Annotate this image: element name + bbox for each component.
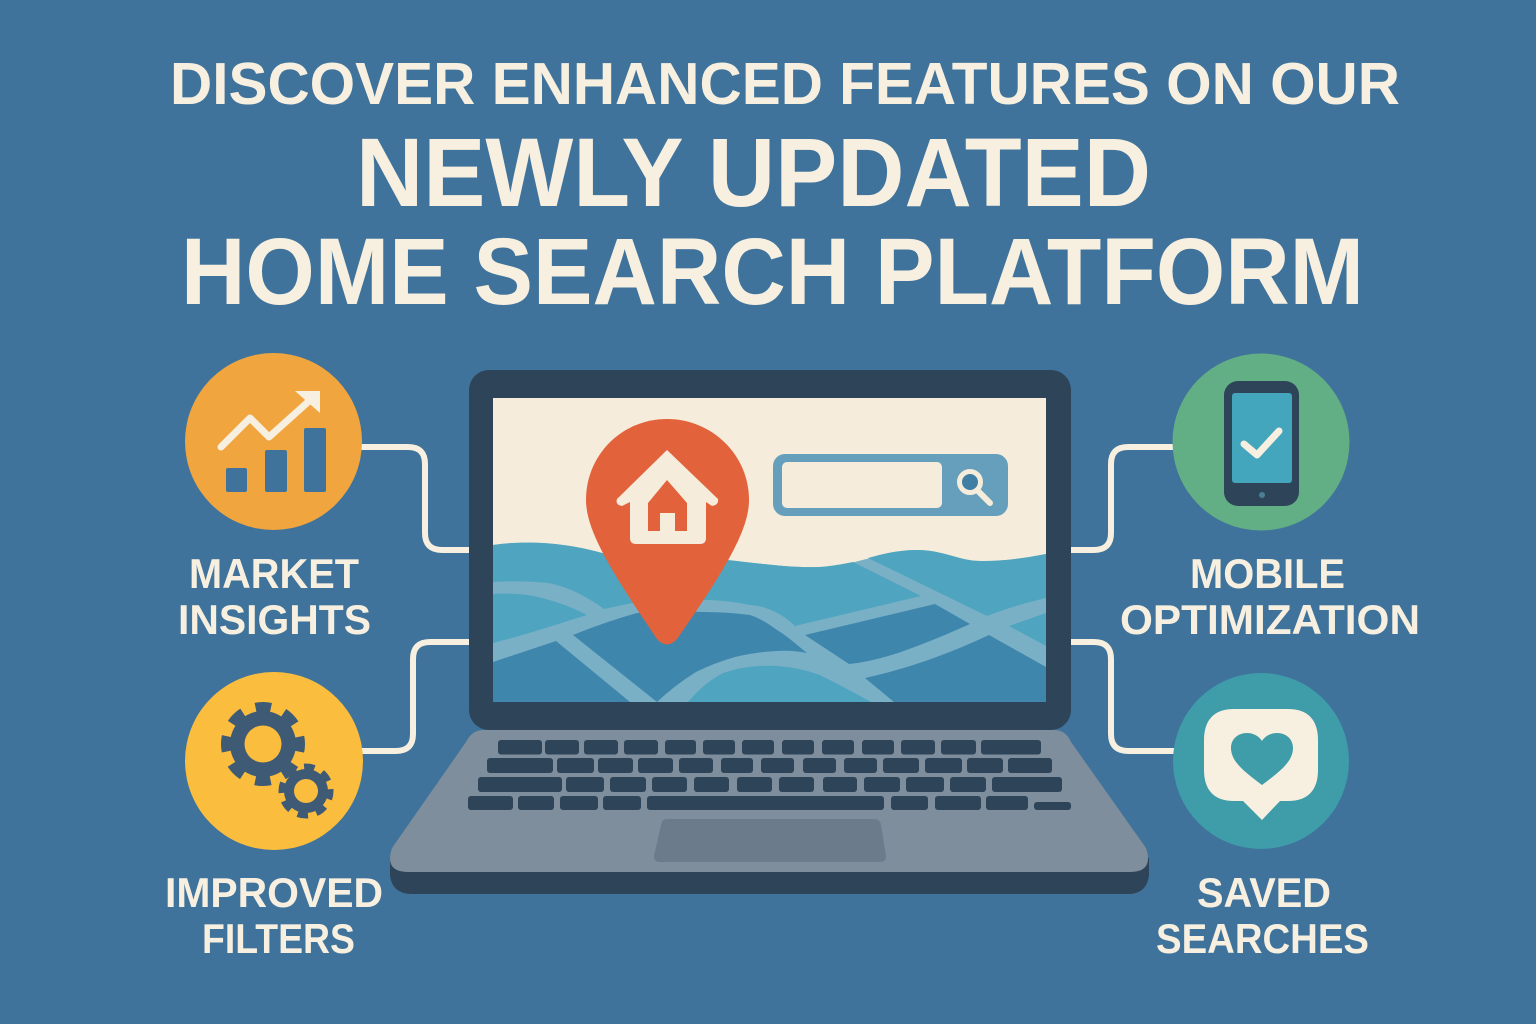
title: DISCOVER ENHANCED FEATURES ON OUR [170,51,1400,117]
icon: rising chart [185,353,362,530]
icon: phone with check [1172,354,1350,530]
label [178,550,371,643]
label: FILTERS [202,915,355,962]
trackpad [654,819,886,862]
label [1120,550,1420,643]
label: MOBILE [1190,550,1345,597]
laptop base top [390,730,1148,872]
title [170,51,1400,325]
laptop lid [469,370,1071,730]
label: MARKET [189,550,359,597]
label: INSIGHTS [178,596,371,643]
title: NEWLY UPDATED [356,118,1151,227]
search bar [773,454,1008,516]
label: IMPROVED [165,869,383,916]
label: SAVED [1197,869,1331,916]
icon: heart speech bubble [1173,673,1349,849]
feature: improved filters [165,672,383,962]
label: OPTIMIZATION [1120,596,1420,643]
connector lines [360,447,1175,751]
laptop base underside [390,858,1149,894]
label [1156,869,1369,962]
title: HOME SEARCH PLATFORM [181,219,1364,325]
feature: saved searches [1156,673,1369,962]
label [165,869,383,962]
label: SEARCHES [1156,915,1369,962]
keyboard [468,740,1071,810]
laptop screen [493,398,1046,702]
feature: market insights [178,353,371,643]
location pin with house [586,419,749,644]
feature: mobile optimization [1120,354,1420,643]
laptop [390,370,1149,894]
icon: gears [185,672,363,850]
